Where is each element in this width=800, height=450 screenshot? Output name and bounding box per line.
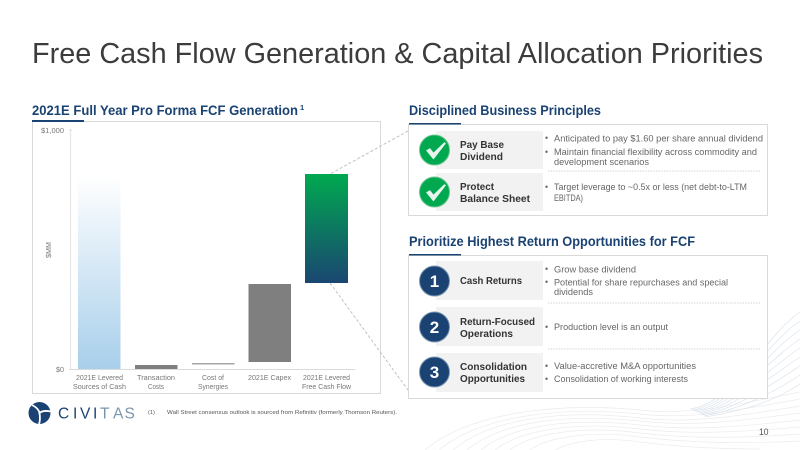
row: pay base dividend: • [545,147,548,157]
heading: FCF generation: 1 [300,103,304,112]
axis labels: $0 [56,365,64,374]
category labels: Transaction [137,373,175,382]
panel: FCF waterfall chart [32,120,380,394]
category labels: Free Cash Flow [302,382,352,391]
row: protect balance sheet [420,173,747,211]
footnote: (1) [148,410,155,416]
row 1: cash returns: 1 [430,272,439,291]
row: pay base dividend [420,131,763,169]
row 1: cash returns: dividends [554,287,594,297]
axis labels [41,126,64,374]
row 3: consolidation opportunities: Value-accretive M&A opportunities [554,361,697,371]
row 2: return-focused operations [420,307,669,346]
category labels: Costs [148,382,164,391]
row 2: return-focused operations: • [545,322,548,332]
axis labels: $MM [44,242,53,258]
callout connector lines [330,131,408,390]
category labels: 2021E Levered [76,373,123,382]
heading: FCF generation: 2021E Full Year Pro Forma FCF Generation [32,102,298,118]
logo: Civitas: CIVI [58,406,97,422]
row 3: consolidation opportunities: 3 [430,363,439,382]
bar: cost of synergies [192,363,234,364]
row 3: consolidation opportunities [420,353,697,392]
category labels: Sources of Cash [73,382,126,391]
category labels: 2021E Capex [248,373,291,382]
bar: transaction costs [135,365,178,369]
category labels [73,373,352,391]
footnote: Wall Street consensus outlook is sourced from Refinitiv (formerly Thomson Reuters). [167,410,397,416]
bar: levered sources of cash [78,177,120,369]
row 1: cash returns: Cash Returns [460,276,522,287]
logo: Civitas: TAS [100,406,135,422]
row 3: consolidation opportunities: Consolidation [460,362,527,373]
row 2: return-focused operations: Return-Focused [460,317,535,328]
panel: disciplined business principles [408,123,768,216]
row: protect balance sheet: Protect [460,182,495,193]
row 3: consolidation opportunities: Opportunities [460,374,525,385]
row 3: consolidation opportunities: Consolidation of working interests [554,374,689,384]
category labels: Cost of [202,373,224,382]
row 1: cash returns: • [545,277,548,287]
row 2: return-focused operations: Operations [460,329,513,340]
row 1: cash returns [420,261,728,300]
row: protect balance sheet: Target leverage to ~0.5x or less (net debt-to-LTM [554,182,747,192]
row: protect balance sheet: EBITDA) [554,193,583,203]
logo: Civitas [28,402,135,424]
row: pay base dividend: Pay Base [460,140,504,151]
heading: principles: Disciplined Business Principles [409,102,601,118]
row: protect balance sheet: • [545,182,548,192]
row: pay base dividend: Dividend [460,152,503,163]
category labels: 2021E Levered [303,373,350,382]
row 1: cash returns: Potential for share repurchases and special [554,278,728,288]
title: Free Cash Flow Generation & Capital Allocation Priorities [32,38,763,70]
page number: 10 [759,427,768,438]
row: protect balance sheet: Balance Sheet [460,194,531,205]
row: pay base dividend: development scenarios [554,157,650,167]
heading: opportunities: Prioritize Highest Return Opportunities for FCF [409,233,695,249]
row 1: cash returns: • [545,264,548,274]
row: pay base dividend: Anticipated to pay $1.60 per share annual dividend [554,134,763,144]
row 3: consolidation opportunities: • [545,361,548,371]
row: pay base dividend: Maintain financial flexibility across commodity and [554,147,757,157]
bar: capex [248,284,291,362]
row 3: consolidation opportunities: • [545,374,548,384]
background waves [425,312,800,450]
bar: levered free cash flow [305,174,348,283]
row 2: return-focused operations: Production level is an output [554,322,669,332]
panel: return opportunities [408,254,768,398]
row 2: return-focused operations: 2 [430,318,439,337]
axis labels: $1,000 [41,126,64,135]
category labels: Synergies [198,382,228,391]
row 1: cash returns: Grow base dividend [554,264,636,274]
row: pay base dividend: • [545,133,548,143]
